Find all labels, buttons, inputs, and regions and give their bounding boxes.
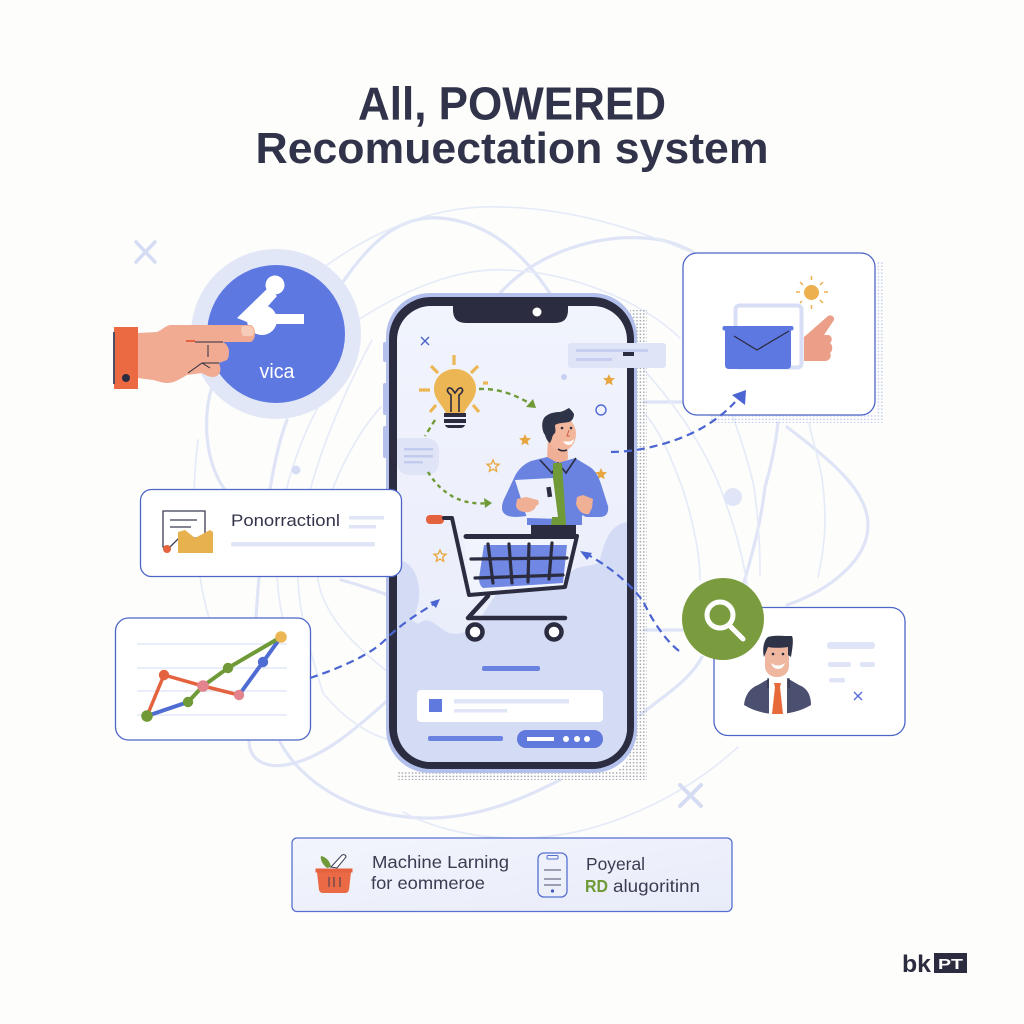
card text lines xyxy=(349,516,384,520)
search badge xyxy=(682,578,764,660)
icon: thumbs up hand xyxy=(804,315,834,361)
card label: Ponorractionl xyxy=(231,512,340,530)
icon: basket xyxy=(316,855,352,893)
icon: sun xyxy=(796,276,828,309)
shopper collar xyxy=(540,458,576,473)
footer label right: Poyeral xyxy=(586,854,645,874)
cart frame xyxy=(444,518,577,618)
shopper tie xyxy=(551,463,566,525)
phone xyxy=(383,293,637,773)
round badge with hand xyxy=(113,249,361,419)
cart wheels xyxy=(468,624,482,640)
small dot xyxy=(561,374,567,380)
decorative cross lower right xyxy=(680,785,701,806)
cart basket fill xyxy=(479,545,567,588)
phone screen xyxy=(397,306,627,762)
shopper clipboard xyxy=(515,478,561,519)
chart series red xyxy=(147,675,239,716)
chart series blue xyxy=(147,637,281,716)
small ring xyxy=(596,405,606,415)
floating note on screen top right xyxy=(568,343,666,368)
logo bottom right: PT xyxy=(938,956,963,973)
screen action pill xyxy=(517,730,603,748)
footer label right: alugoritinn xyxy=(613,876,700,896)
shopper shirt xyxy=(502,457,608,525)
dashed blue arrow from chart to cart xyxy=(310,599,440,678)
icon: note and envelope xyxy=(163,511,213,553)
badge label: vica xyxy=(260,361,295,383)
footer label right xyxy=(585,854,700,896)
badge glyph xyxy=(237,276,304,335)
dashed blue arrow from search to cart xyxy=(580,551,679,651)
orbit decorations xyxy=(136,242,742,806)
cart basket white interior xyxy=(464,537,576,594)
speech bubble on screen left xyxy=(397,438,439,475)
phone body xyxy=(386,293,637,773)
chart gridlines xyxy=(137,644,287,715)
phone notch xyxy=(453,304,568,323)
orbit lines background xyxy=(194,207,868,838)
card: person with search xyxy=(682,578,905,736)
title: Recomuectation system xyxy=(256,124,768,173)
footer label right: RD xyxy=(585,876,608,896)
small screen decorations xyxy=(421,337,606,415)
magnifier icon xyxy=(707,602,743,639)
phone camera xyxy=(532,308,542,316)
card dotted shadow xyxy=(709,262,884,423)
icon: person xyxy=(744,636,811,714)
card text lines xyxy=(827,642,875,649)
orbit dot right xyxy=(724,488,742,506)
shopper legs xyxy=(531,524,576,537)
shopper hands xyxy=(516,497,539,512)
shirt cuff xyxy=(114,327,138,389)
dashed green flow arrows xyxy=(425,389,536,508)
shopper neck xyxy=(547,438,568,467)
chart series green xyxy=(188,637,281,702)
small cross xyxy=(421,337,429,345)
icon: phone outline xyxy=(538,853,567,897)
screen hills xyxy=(397,522,627,762)
badge disc xyxy=(207,265,345,403)
logo bottom right xyxy=(902,951,967,978)
phone side buttons xyxy=(383,342,388,458)
screen list card xyxy=(417,690,603,722)
icon: background frame xyxy=(736,306,802,368)
dashed blue arrow from phone to top right card xyxy=(611,390,746,452)
icon: light bulb xyxy=(419,355,488,428)
chart points xyxy=(141,631,287,722)
screen progress line xyxy=(428,736,503,741)
footer label left xyxy=(371,852,509,893)
title: All, POWERED xyxy=(358,78,666,130)
shopper hair xyxy=(542,408,574,443)
card: personalization message xyxy=(140,490,402,576)
badge ring xyxy=(191,249,361,419)
footer label left: for eommeroe xyxy=(371,873,485,893)
card: top right envelope xyxy=(683,253,884,423)
logo bottom right: bk xyxy=(902,951,932,978)
decorative cross upper left xyxy=(136,242,155,262)
clipboard clip xyxy=(546,487,552,497)
orbit dot left xyxy=(292,466,300,474)
title xyxy=(256,78,768,173)
footer strip xyxy=(292,838,732,912)
shopping cart xyxy=(426,515,577,640)
hand pointing xyxy=(113,325,255,389)
small cross xyxy=(854,692,862,700)
footer label left: Machine Larning xyxy=(372,852,509,872)
screen bottom controls xyxy=(417,666,603,748)
cart handle grip xyxy=(426,515,444,524)
phone dotted shadow xyxy=(397,310,647,780)
shopper character xyxy=(502,408,608,537)
shopper face xyxy=(548,417,576,451)
stars on screen xyxy=(434,374,615,561)
small indicator bar xyxy=(482,666,540,671)
card: line chart xyxy=(116,618,310,740)
icon: envelope xyxy=(722,326,794,369)
